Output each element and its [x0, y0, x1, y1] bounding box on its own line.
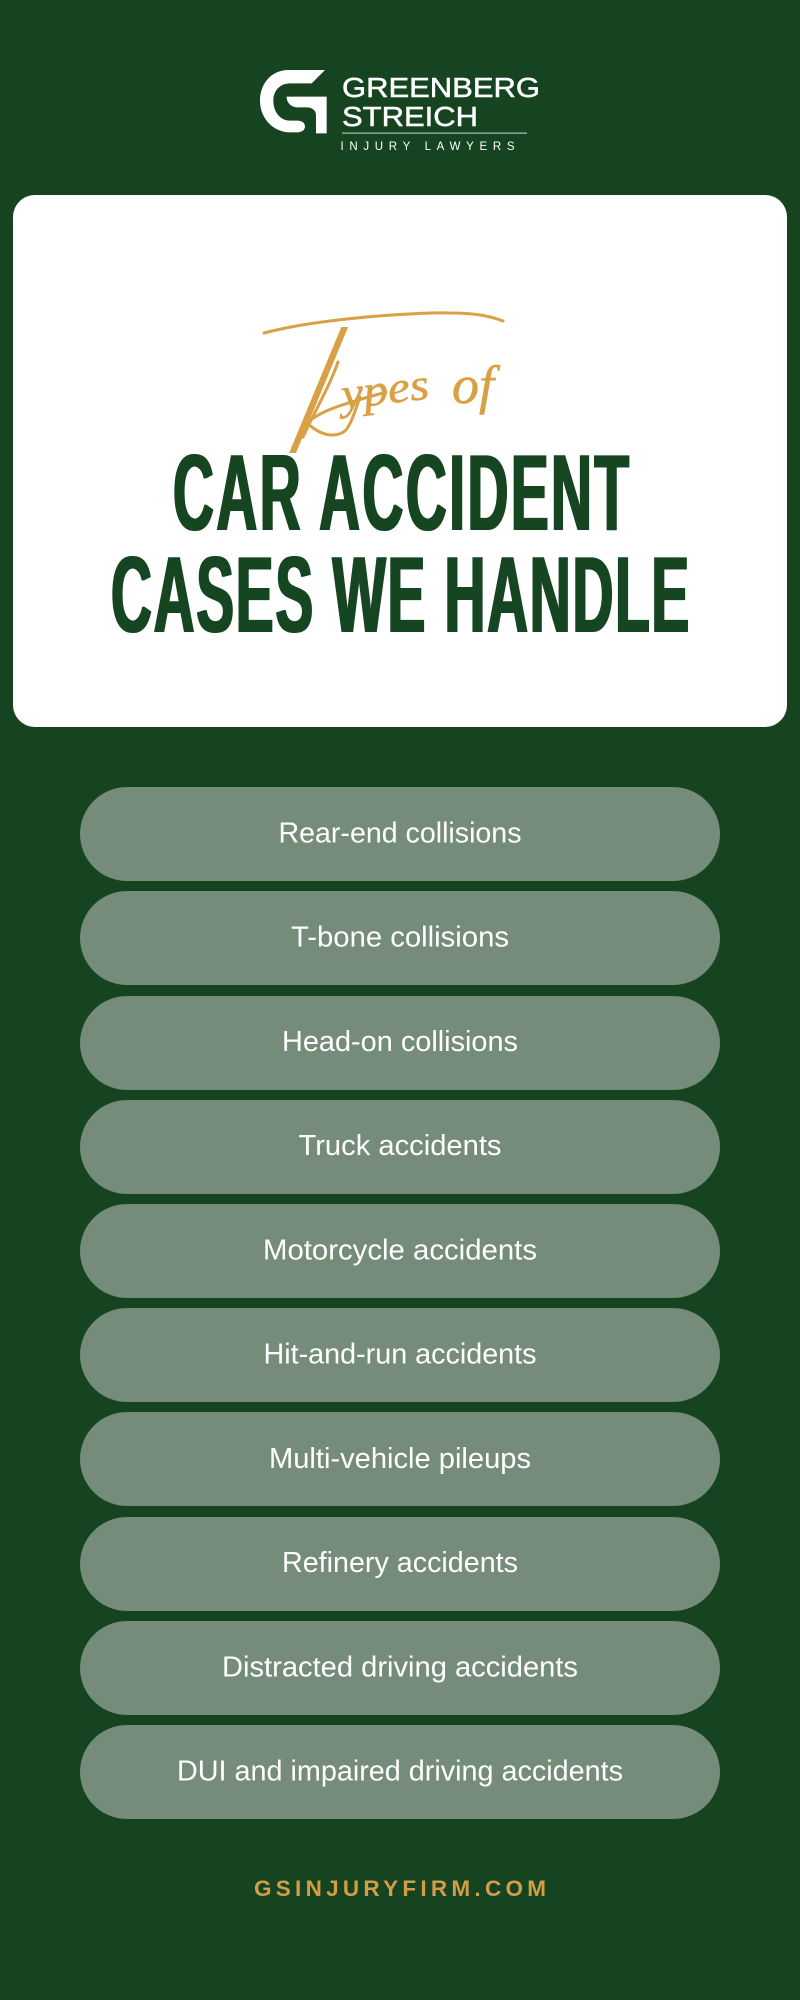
icon: G logo mark	[260, 70, 327, 133]
pill: T-bone collisions: T-bone collisions	[291, 922, 509, 954]
pill: Refinery accidents: Refinery accidents	[282, 1547, 518, 1579]
panel: title card	[13, 195, 787, 727]
pill: Distracted driving accidents: Distracted driving accidents	[222, 1652, 578, 1684]
pill: Head-on collisions	[80, 996, 720, 1090]
logo wordmark: STREICH	[342, 101, 478, 132]
pill: DUI and impaired driving accidents: DUI and impaired driving accidents	[177, 1756, 623, 1788]
pill: Rear-end collisions: Rear-end collisions	[278, 818, 522, 850]
logo wordmark: GREENBERG	[342, 72, 540, 103]
pill: Truck accidents	[80, 1100, 720, 1194]
footer website: GSINJURYFIRM.COM	[254, 1876, 546, 1901]
pill: Head-on collisions: Head-on collisions	[282, 1026, 518, 1058]
list of accident types	[80, 787, 720, 1819]
pill: Hit-and-run accidents: Hit-and-run accidents	[264, 1339, 536, 1371]
script heading: Types of	[262, 311, 504, 453]
pill: Truck accidents: Truck accidents	[298, 1130, 502, 1162]
pill: Distracted driving accidents	[80, 1621, 720, 1715]
script heading: Types of: ypes	[334, 360, 432, 419]
logo wordmark: INJURY LAWYERS	[340, 141, 515, 153]
pill: Refinery accidents	[80, 1517, 720, 1611]
heading: car accident cases we handle: CAR ACCIDENT	[173, 432, 629, 554]
heading: car accident cases we handle: CASES WE HANDLE	[111, 534, 689, 656]
logo	[260, 70, 540, 153]
script heading: Types of: of	[452, 355, 501, 415]
pill: DUI and impaired driving accidents	[80, 1725, 720, 1819]
script heading: Types of: T	[251, 262, 394, 498]
pill: T-bone collisions	[80, 891, 720, 985]
pill: Multi-vehicle pileups	[80, 1412, 720, 1506]
logo wordmark	[340, 72, 540, 153]
pill: Motorcycle accidents	[80, 1204, 720, 1298]
heading: car accident cases we handle	[111, 432, 689, 656]
pill: Motorcycle accidents: Motorcycle accidents	[263, 1234, 537, 1266]
pill: Hit-and-run accidents	[80, 1308, 720, 1402]
pill: Rear-end collisions	[80, 787, 720, 881]
pill: Multi-vehicle pileups: Multi-vehicle pileups	[269, 1443, 531, 1475]
